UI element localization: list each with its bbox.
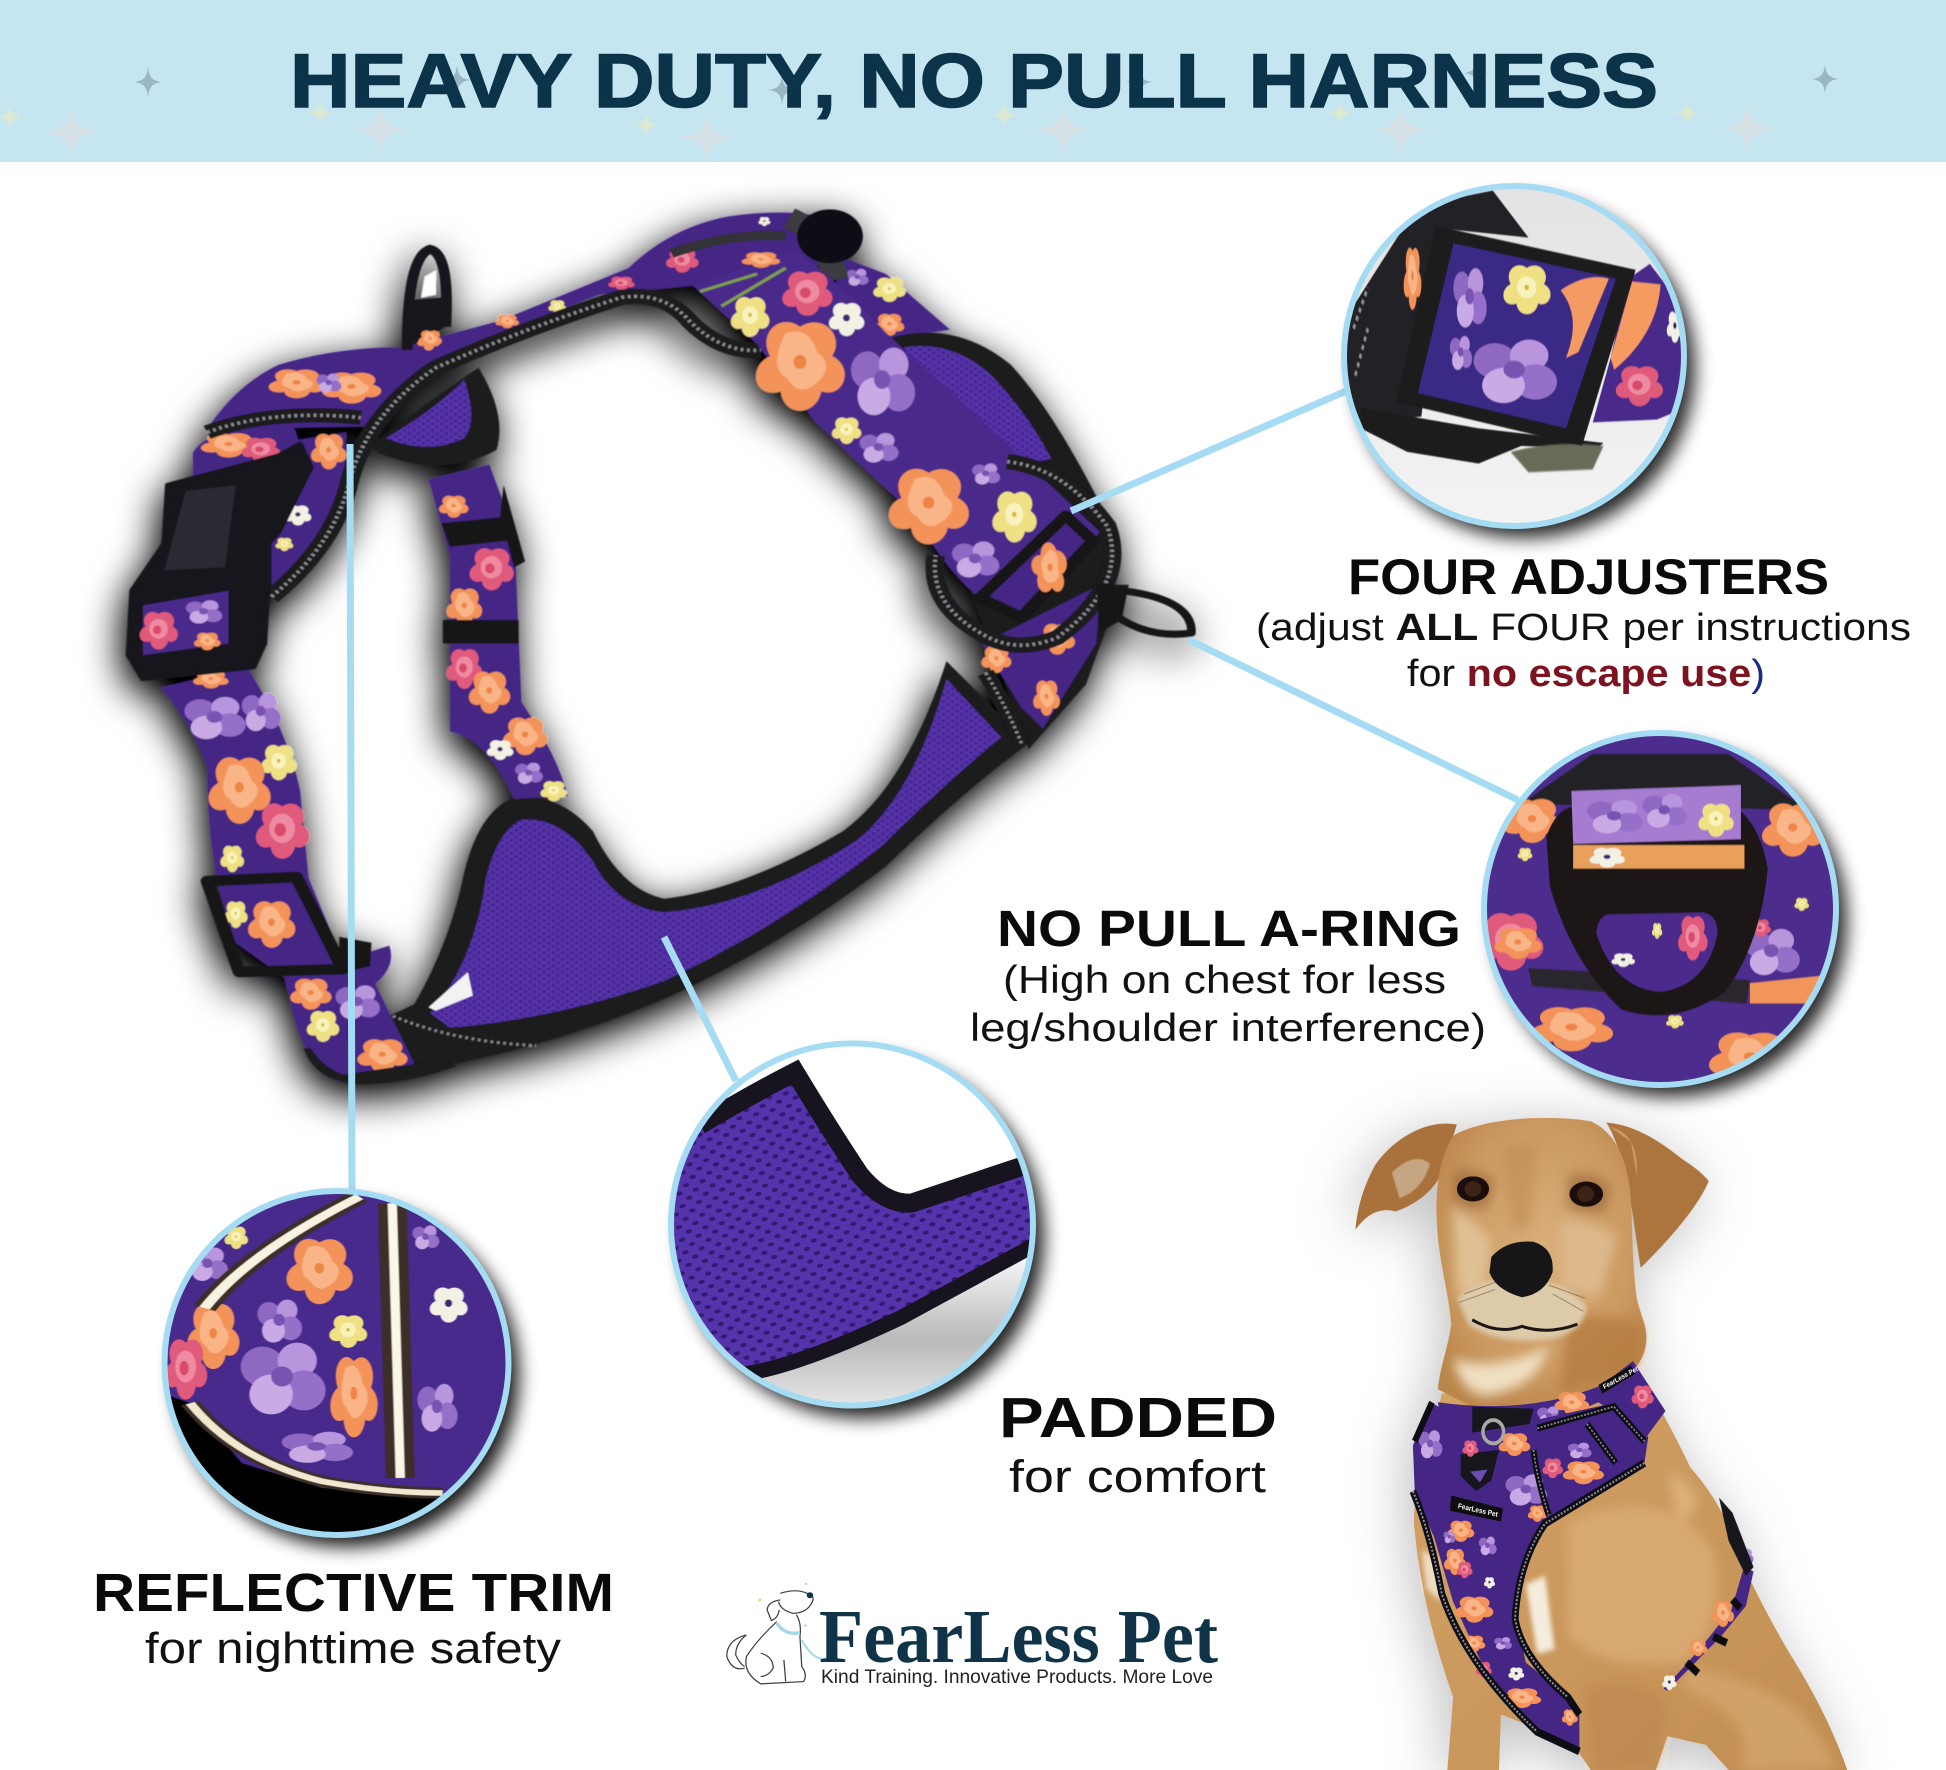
label: padded: PADDED (999, 1386, 1277, 1450)
harness leash ring and clip (1461, 1407, 1533, 1491)
side D-ring (1096, 585, 1191, 634)
black background at lower left (170, 1396, 443, 1532)
line to no pull ring (1189, 640, 1518, 800)
webbing (1343, 191, 1528, 422)
label: four adjusters: for no escape use ) (1407, 653, 1765, 695)
dog head (1436, 1118, 1646, 1407)
harness brand label: FearLess Pet (1457, 1503, 1499, 1519)
FearLess Pet logo (727, 1582, 1218, 1688)
black reflective piping (207, 218, 836, 597)
left outer strap (161, 667, 414, 1083)
far shoulder strap (836, 256, 950, 341)
dog wearing harness photo (1355, 1118, 1847, 1770)
line to padded (664, 937, 736, 1081)
right adjuster loop (935, 462, 1112, 645)
label: reflective trim: REFLECTIVE TRIM (93, 1563, 614, 1623)
harness collar (1438, 1361, 1665, 1437)
dog eyes (1457, 1176, 1603, 1207)
dog ear left (1355, 1124, 1457, 1230)
harness brand label (1450, 1496, 1503, 1522)
D-ring (1546, 807, 1768, 1015)
header banner (0, 0, 1946, 164)
label: no pull A-ring (970, 900, 1486, 1050)
label: no pull A-ring: NO PULL A-RING (997, 900, 1461, 957)
big diagonal floral strap (693, 250, 1100, 614)
label: reflective trim (93, 1563, 614, 1673)
harness collar: FearLess Pet (1602, 1365, 1640, 1391)
label: four adjusters: (adjust ALL FOUR per instructions (1256, 607, 1911, 649)
inner back strap (429, 465, 568, 801)
label: padded: for comfort (1009, 1451, 1267, 1502)
label: no pull A-ring: (High on chest for less (1003, 959, 1446, 1002)
neck band with floral print (207, 213, 850, 429)
dog mouth (1472, 1320, 1577, 1330)
logo dog line drawing (727, 1582, 835, 1684)
top black pad (797, 209, 863, 263)
label: four adjusters: FOUR ADJUSTERS (1348, 549, 1829, 605)
label: padded (999, 1386, 1277, 1502)
dog facial shading (1453, 1142, 1641, 1396)
harness chest plate (1413, 1402, 1648, 1751)
reflective stripes (190, 1197, 443, 1493)
side release buckle (129, 444, 311, 679)
line to reflective trim (350, 444, 352, 1192)
dorsal D-ring (407, 249, 446, 350)
chest mesh panel (307, 661, 1029, 1070)
dog chest white patches (1422, 1550, 1554, 1654)
leader lines (350, 391, 1518, 1192)
dog body shading (1568, 1472, 1836, 1770)
left shoulder mesh pad (371, 368, 499, 465)
detail: four adjusters (1330, 170, 1700, 540)
dog nose (1489, 1242, 1553, 1297)
logo tagline: Kind Training. Innovative Products. More Love (821, 1667, 1213, 1688)
harness back strap and side buckle (1662, 1498, 1753, 1691)
frame (1396, 226, 1636, 446)
dog ear right (1606, 1123, 1709, 1268)
line to four adjusters (1071, 391, 1346, 511)
bottom edge tip (304, 1048, 457, 1084)
lower right floral layer (982, 585, 1100, 743)
label: no pull A-ring: leg/shoulder interference) (970, 1007, 1486, 1050)
detail: reflective trim (155, 1180, 520, 1547)
label: four adjusters (1256, 549, 1911, 695)
right back mesh panel (893, 333, 1114, 749)
dog body (1414, 1368, 1847, 1770)
detail: padded mesh (660, 1040, 1044, 1418)
harness product illustration (129, 209, 1191, 1084)
detail: no pull ring (1470, 720, 1850, 1100)
right strap (1592, 263, 1681, 424)
logo wordmark: FearLess Pet (819, 1595, 1218, 1679)
title: HEAVY DUTY, NO PULL HARNESS (290, 39, 1658, 124)
floral panel beside buckle (193, 423, 346, 591)
header sparkles (0, 60, 1839, 164)
rolled webbing (1571, 785, 1741, 844)
label: reflective trim: for nighttime safety (145, 1624, 561, 1673)
dog muzzle (1457, 1279, 1587, 1341)
